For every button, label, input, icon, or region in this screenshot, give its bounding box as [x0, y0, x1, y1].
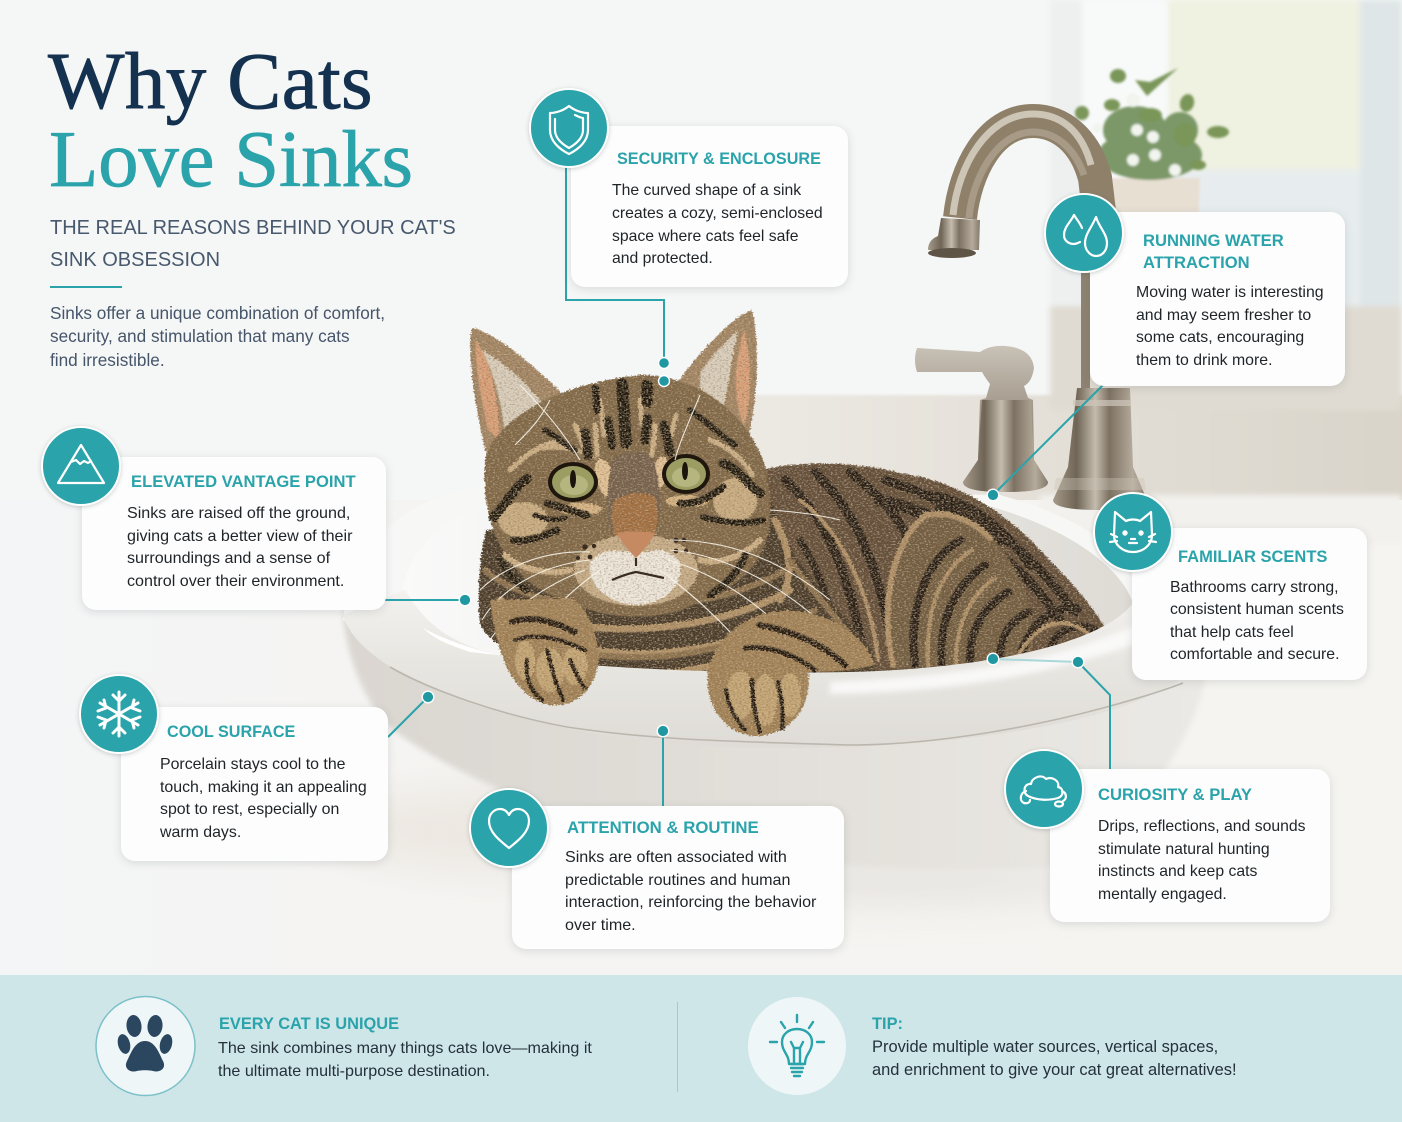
cat: body hump [760, 464, 1108, 684]
text: familiar scents: comfortable and secure. [1170, 646, 1339, 663]
text: familiar scents: that help cats feel [1170, 624, 1294, 641]
text: curiosity [1098, 818, 1305, 903]
body: tip [872, 1038, 1237, 1079]
head colour patches [498, 444, 757, 538]
text: cool surface: warm days. [160, 824, 241, 841]
subtitle [50, 217, 456, 271]
connector: curiosity [1078, 662, 1110, 770]
title: Why Cats [48, 36, 373, 126]
text: curiosity: stimulate natural hunting [1098, 841, 1270, 858]
icon: snowflake [79, 674, 159, 754]
text: attention [565, 848, 816, 934]
text: attention: Sinks are often associated with [565, 848, 787, 866]
text: security: space where cats feel safe [612, 228, 798, 245]
text: elevated: giving cats a better view of their [127, 527, 352, 545]
text: cool surface: spot to rest, especially on [160, 801, 339, 818]
heading: elevated: ELEVATED VANTAGE POINT [131, 472, 356, 491]
icon: water drops [1044, 193, 1124, 273]
heading: running water: ATTRACTION [1143, 253, 1250, 272]
text: running water: Moving water is interesting [1136, 284, 1324, 301]
text: familiar scents: Bathrooms carry strong, [1170, 579, 1339, 596]
faucet [915, 114, 1147, 510]
panel: familiar scents [1132, 528, 1367, 680]
body: tip: Provide multiple water sources, vertical spaces, [872, 1038, 1218, 1056]
subtitle: THE REAL REASONS BEHIND YOUR CAT'S [50, 217, 456, 239]
heading: familiar scents: FAMILIAR SCENTS [1178, 548, 1327, 566]
icon: heart [469, 788, 549, 868]
intro paragraph [50, 303, 385, 370]
connector dots [422, 358, 1084, 737]
text: elevated: control over their environment. [127, 572, 344, 590]
connector: familiar scents [993, 659, 1078, 662]
heading: attention: ATTENTION & ROUTINE [567, 818, 759, 837]
text: elevated [127, 504, 352, 590]
cat: ears [470, 310, 757, 480]
panel: cool surface [121, 707, 388, 861]
connector: running water [993, 385, 1103, 495]
heading: running water: RUNNING WATER [1143, 231, 1284, 250]
text: attention: interaction, reinforcing the behavior [565, 893, 816, 911]
cat: eyes and nose [548, 454, 710, 580]
body: every cat: The sink combines many things cats love—making it [218, 1039, 592, 1057]
text: cool surface [160, 756, 367, 841]
connector: cool [388, 697, 428, 737]
text: tip [872, 1015, 1237, 1079]
text: curiosity: mentally engaged. [1098, 886, 1227, 903]
heading: curiosity: CURIOSITY & PLAY [1098, 785, 1252, 804]
icon: mountain [41, 426, 121, 506]
heading: cool surface: COOL SURFACE [167, 723, 295, 741]
panel: running water attraction [1090, 212, 1345, 386]
icon: cat face [1093, 492, 1173, 572]
title: Love Sinks [49, 114, 413, 204]
text: elevated: surroundings and a sense of [127, 549, 330, 567]
intro paragraph: Sinks offer a unique combination of comfort, [50, 303, 385, 323]
heading: tip: TIP: [872, 1015, 903, 1033]
title [48, 36, 413, 204]
text: cool surface: Porcelain stays cool to the [160, 756, 346, 773]
footer band [0, 975, 1402, 1122]
intro paragraph: security, and stimulation that many cats [50, 326, 350, 346]
panel: elevated vantage point [82, 457, 386, 610]
heading: running water [1143, 231, 1284, 272]
text: curiosity: Drips, reflections, and sounds [1098, 818, 1305, 835]
intro paragraph: find irresistible. [50, 350, 165, 370]
text: security [612, 182, 823, 267]
body: every cat [218, 1039, 592, 1080]
icon: light bulb [748, 997, 846, 1095]
icon: paw [95, 996, 196, 1096]
text: curiosity: instincts and keep cats [1098, 863, 1257, 880]
sink [343, 485, 1210, 870]
panel: curiosity & play [1050, 769, 1330, 922]
cat: front paws [490, 598, 875, 736]
cat body and head [470, 310, 1108, 690]
text: security: The curved shape of a sink [612, 182, 801, 199]
icon: cloud toy [1004, 749, 1084, 829]
text: running water: some cats, encouraging [1136, 329, 1304, 346]
text: familiar scents [1170, 579, 1344, 663]
title divider [50, 286, 122, 288]
panel: security & enclosure [571, 126, 848, 287]
text: running water: them to drink more. [1136, 352, 1272, 369]
cat: head fur [485, 375, 771, 617]
heading: every cat: EVERY CAT IS UNIQUE [219, 1015, 399, 1033]
connector: security [566, 165, 664, 363]
connector: elevated [384, 599, 465, 601]
text: attention: predictable routines and human [565, 871, 790, 889]
cat: chest and neck [479, 500, 880, 690]
connector: attention [662, 731, 664, 806]
text: attention: over time. [565, 916, 636, 934]
body: every cat: the ultimate multi-purpose destination. [218, 1062, 490, 1080]
text: every cat is unique [218, 1015, 592, 1080]
cat: whiskers [480, 385, 840, 660]
heading: security: SECURITY & ENCLOSURE [617, 150, 821, 168]
panel: attention & routine [512, 806, 844, 949]
text: elevated: Sinks are raised off the ground, [127, 504, 350, 522]
text: familiar scents: consistent human scents [1170, 601, 1344, 618]
text: cool surface: touch, making it an appealing [160, 779, 367, 796]
text: security: creates a cozy, semi-enclosed [612, 205, 823, 222]
text: running water: and may seem fresher to [1136, 307, 1311, 324]
subtitle: SINK OBSESSION [50, 249, 220, 271]
footer separator [677, 1002, 678, 1092]
icon: shield [529, 88, 609, 168]
text: running water [1136, 284, 1324, 369]
sink front rim [343, 590, 1212, 748]
window with plant [1050, 0, 1402, 410]
text: security: and protected. [612, 250, 713, 267]
body: tip: and enrichment to give your cat great alternatives! [872, 1061, 1237, 1079]
